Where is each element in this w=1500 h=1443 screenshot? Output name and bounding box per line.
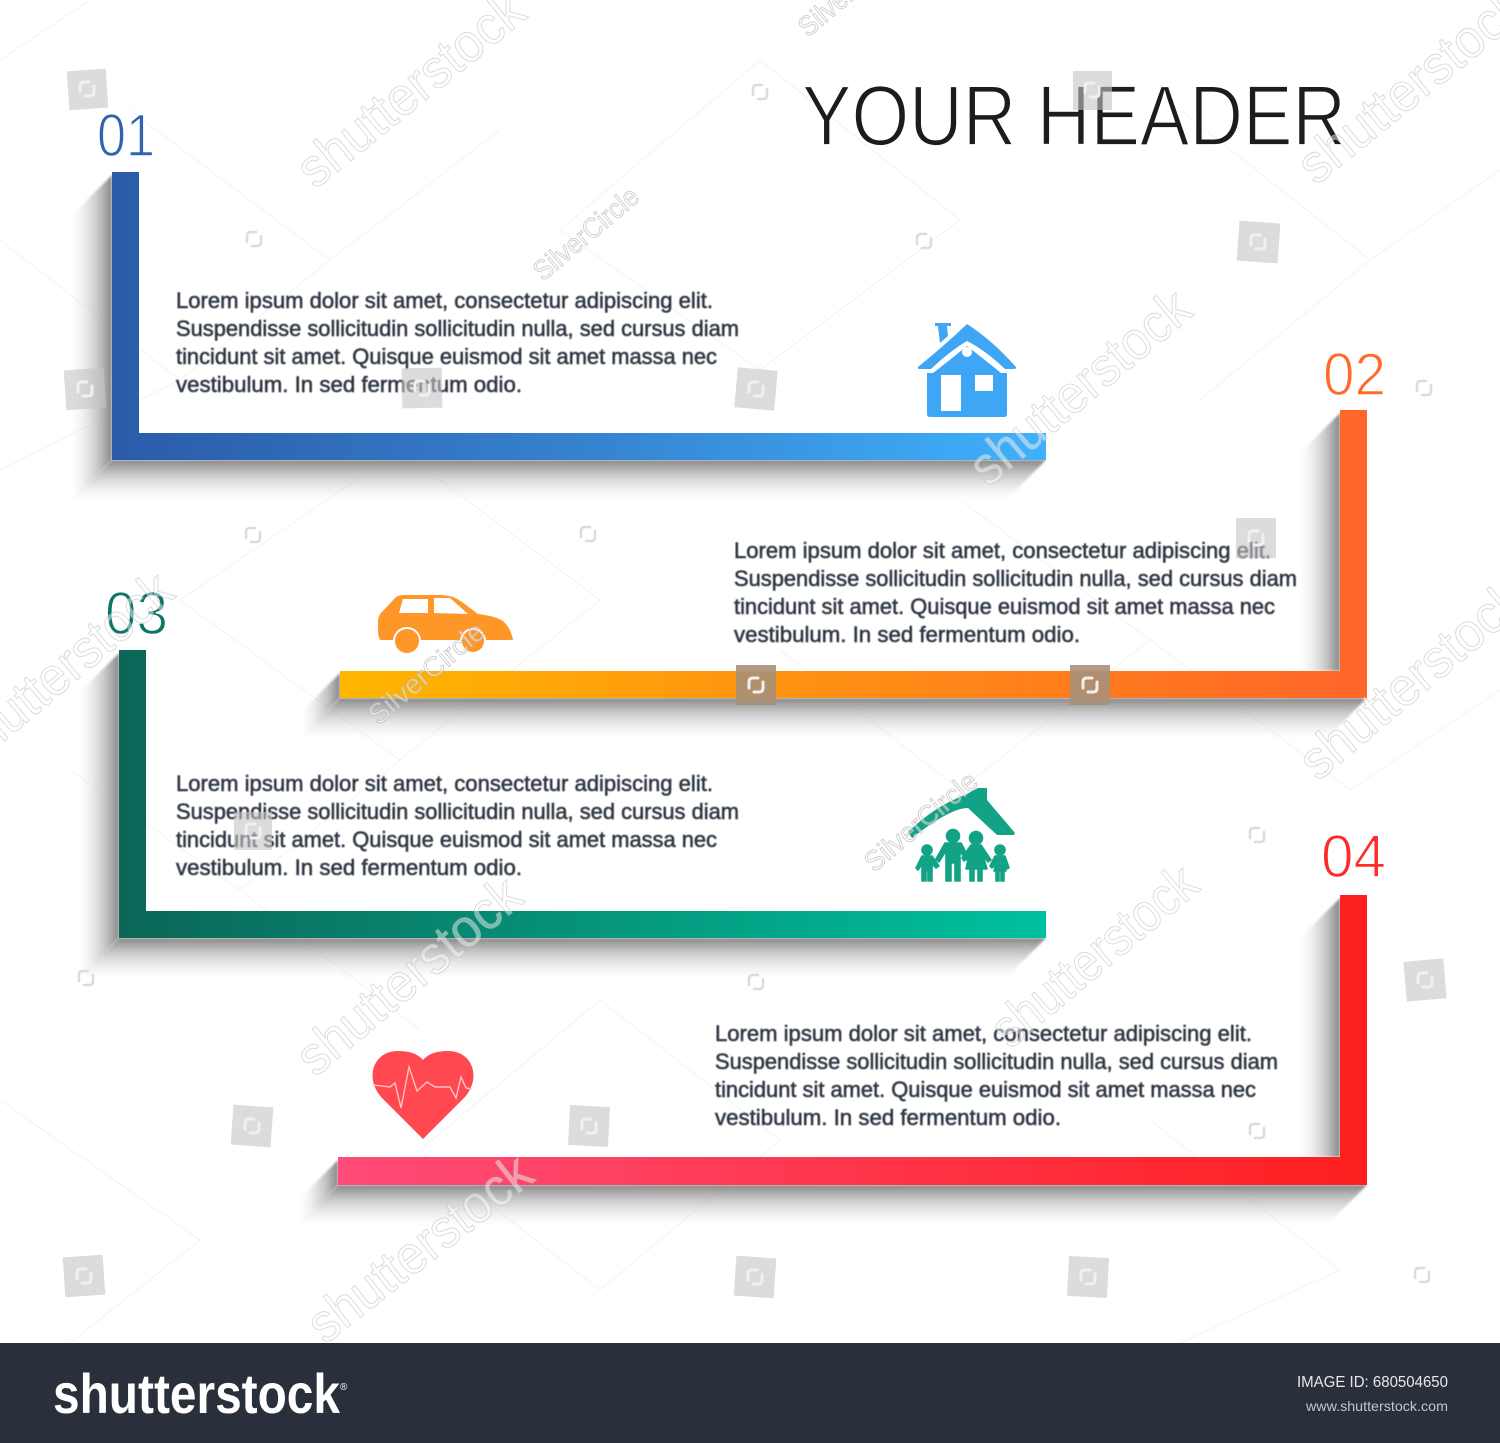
watermark: grey stamps [63,69,1447,1298]
text block 2: Suspendisse sollicitudin sollicitudin nulla, sed cursus diam [734,566,1297,591]
text block 3: vestibulum. In sed fermentum odio. [176,855,522,880]
number 03: 03 [105,580,168,647]
footer website: www.shutterstock.com [1305,1398,1448,1414]
text block 1 [176,288,739,397]
text block 2: tincidunt sit amet. Quisque euismod sit amet massa nec [734,594,1275,619]
icon: house [918,323,1016,417]
step 4: red bracket [300,895,1367,1225]
text block 1: Lorem ipsum dolor sit amet, consectetur adipiscing elit. [176,288,713,313]
footer registered mark: ® [340,1382,348,1393]
text block 2: Lorem ipsum dolor sit amet, consectetur adipiscing elit. [734,538,1271,563]
watermark: shutterstock text: shutterstock [979,852,1210,1059]
watermark: SilverCircle text: SilverCircle [362,616,491,731]
text block 3: tincidunt sit amet. Quisque euismod sit amet massa nec [176,827,717,852]
text block 4: tincidunt sit amet. Quisque euismod sit amet massa nec [715,1077,1256,1102]
footer bar [0,1343,1500,1443]
watermark: SilverCircle text: SilverCircle [858,765,984,878]
footer logo: shutterstock [53,1362,341,1425]
number 04: 04 [1321,823,1386,890]
step 2: orange bracket [302,410,1367,738]
text block 2: vestibulum. In sed fermentum odio. [734,622,1080,647]
watermark: small hollow marks [79,85,1431,1282]
step 1: blue bracket [72,172,1046,500]
text block 2 [734,538,1297,647]
icon: heart with pulse [373,1051,473,1139]
footer image id: IMAGE ID: 680504650 [1297,1374,1448,1391]
text block 3 [176,771,739,880]
watermark: shutterstock text: shutterstock [957,277,1203,497]
text block 1: tincidunt sit amet. Quisque euismod sit amet massa nec [176,344,717,369]
text block 1: vestibulum. In sed fermentum odio. [176,372,522,397]
icon: family under roof [908,788,1015,881]
watermark: shutterstock text: shutterstock [284,864,534,1087]
title: YOUR HEADER [802,69,1346,164]
text block 4 [715,1021,1278,1130]
number 01: 01 [97,102,155,169]
text block 1: Suspendisse sollicitudin sollicitudin nulla, sed cursus diam [176,316,739,341]
watermark: SilverCircle text [362,0,984,878]
watermark: SilverCircle text: SilverCircle [527,181,645,287]
text block 3: Lorem ipsum dolor sit amet, consectetur adipiscing elit. [176,771,713,796]
number 02: 02 [1323,341,1386,408]
text block 3: Suspendisse sollicitudin sollicitudin nulla, sed cursus diam [176,799,739,824]
step 3: green bracket [79,650,1046,978]
text block 4: Suspendisse sollicitudin sollicitudin nulla, sed cursus diam [715,1049,1278,1074]
watermark: shutterstock text: shutterstock [295,1142,544,1354]
text block 4: vestibulum. In sed fermentum odio. [715,1105,1061,1130]
icon: car [378,595,513,654]
text block 4: Lorem ipsum dolor sit amet, consectetur adipiscing elit. [715,1021,1252,1046]
